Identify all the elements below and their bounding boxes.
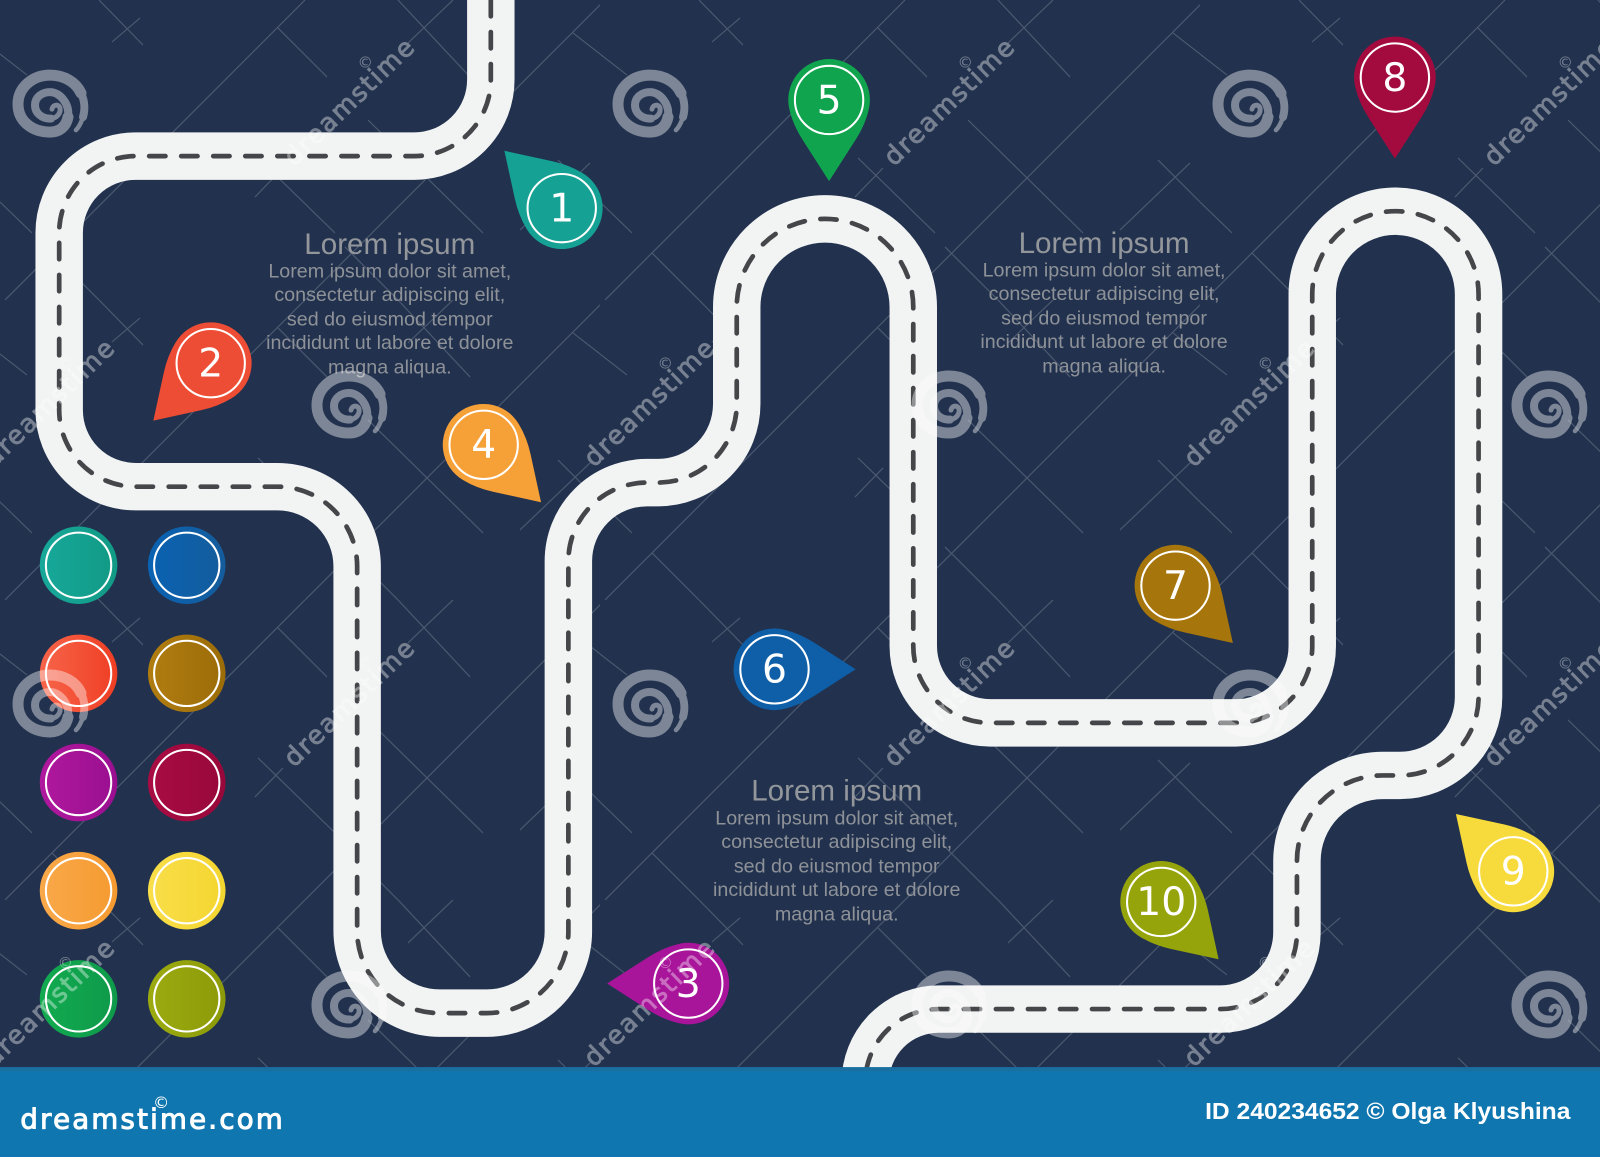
text block: top left: consectetur adipiscing elit, — [274, 284, 505, 306]
footer bar — [0, 1067, 1600, 1157]
watermark text: dreamstime — [878, 634, 1021, 773]
pin 3: 3 — [676, 962, 701, 1007]
text block: top left: incididunt ut labore et dolore — [266, 332, 514, 354]
pin 7: 7 — [1163, 564, 1188, 609]
watermark text: dreamstime — [278, 634, 421, 773]
text block: top left — [266, 228, 514, 378]
pin 1: 1 — [549, 186, 574, 231]
pin 5: 5 — [817, 78, 842, 123]
pin 4 — [426, 387, 570, 531]
watermark text: © — [1258, 954, 1273, 972]
watermark text: © — [358, 654, 373, 672]
pin 2 — [124, 305, 269, 449]
watermark text: dreamstime — [578, 334, 721, 473]
watermark text: dreamstime — [278, 33, 421, 172]
watermark text: © — [658, 354, 673, 372]
pin 6 — [734, 628, 856, 710]
pin 3 — [607, 943, 729, 1024]
pin 8: 8 — [1382, 56, 1407, 101]
text block: top left: magna aliqua. — [328, 356, 452, 378]
text block: top right: incididunt ut labore et dolore — [980, 331, 1228, 353]
pin 1 — [476, 122, 620, 266]
watermark text: © — [358, 53, 373, 71]
text block: bottom centre: magna aliqua. — [775, 903, 899, 925]
pin 4: 4 — [471, 423, 496, 468]
footer bar: © — [153, 1093, 169, 1112]
text block: bottom centre: consectetur adipiscing elit, — [721, 831, 952, 853]
watermark text: © — [1258, 354, 1273, 372]
footer logo: dreamstime.com — [20, 1103, 283, 1135]
pin 8 — [1354, 37, 1436, 159]
pin 5 — [788, 59, 870, 181]
text block: top right: sed do eiusmod tempor — [1001, 307, 1207, 329]
text block: bottom centre — [713, 774, 960, 925]
text block: top right: Lorem ipsum dolor sit amet, — [983, 259, 1226, 281]
text block: top right: Lorem ipsum — [1019, 227, 1190, 260]
watermark text: © — [58, 354, 73, 372]
pin 6: 6 — [762, 648, 787, 693]
watermark text: © — [58, 954, 73, 972]
text block: top left: Lorem ipsum — [304, 228, 475, 261]
colour legend circles — [40, 526, 226, 1038]
pin 9 — [1427, 785, 1571, 929]
watermark text: © — [958, 53, 973, 71]
text block: top right — [980, 227, 1228, 377]
watermark text: dreamstime — [1178, 334, 1321, 473]
pin 9: 9 — [1501, 850, 1526, 895]
pin 2: 2 — [198, 341, 223, 386]
text block: bottom centre: sed do eiusmod tempor — [734, 855, 940, 877]
text block: bottom centre: incididunt ut labore et dolore — [713, 879, 960, 901]
watermark text: © — [958, 654, 973, 672]
watermark text: © — [658, 954, 673, 972]
text block: top right: consectetur adipiscing elit, — [989, 283, 1220, 305]
watermark text: dreamstime — [578, 934, 721, 1073]
watermark text: dreamstime — [878, 33, 1021, 172]
text block: bottom centre: Lorem ipsum dolor sit amet, — [715, 807, 958, 829]
watermark text: dreamstime — [1178, 934, 1321, 1073]
footer credit: ID 240234652 © Olga Klyushina — [1205, 1098, 1571, 1124]
pin 7 — [1118, 528, 1262, 672]
text block: bottom centre: Lorem ipsum — [751, 774, 922, 807]
watermark text: © — [1558, 654, 1573, 672]
watermark text: © — [1558, 53, 1573, 71]
text block: top right: magna aliqua. — [1042, 355, 1166, 377]
pin 10 — [1103, 844, 1247, 988]
text block: top left: Lorem ipsum dolor sit amet, — [268, 261, 511, 283]
pin 10: 10 — [1136, 880, 1186, 925]
text block: top left: sed do eiusmod tempor — [287, 308, 493, 330]
